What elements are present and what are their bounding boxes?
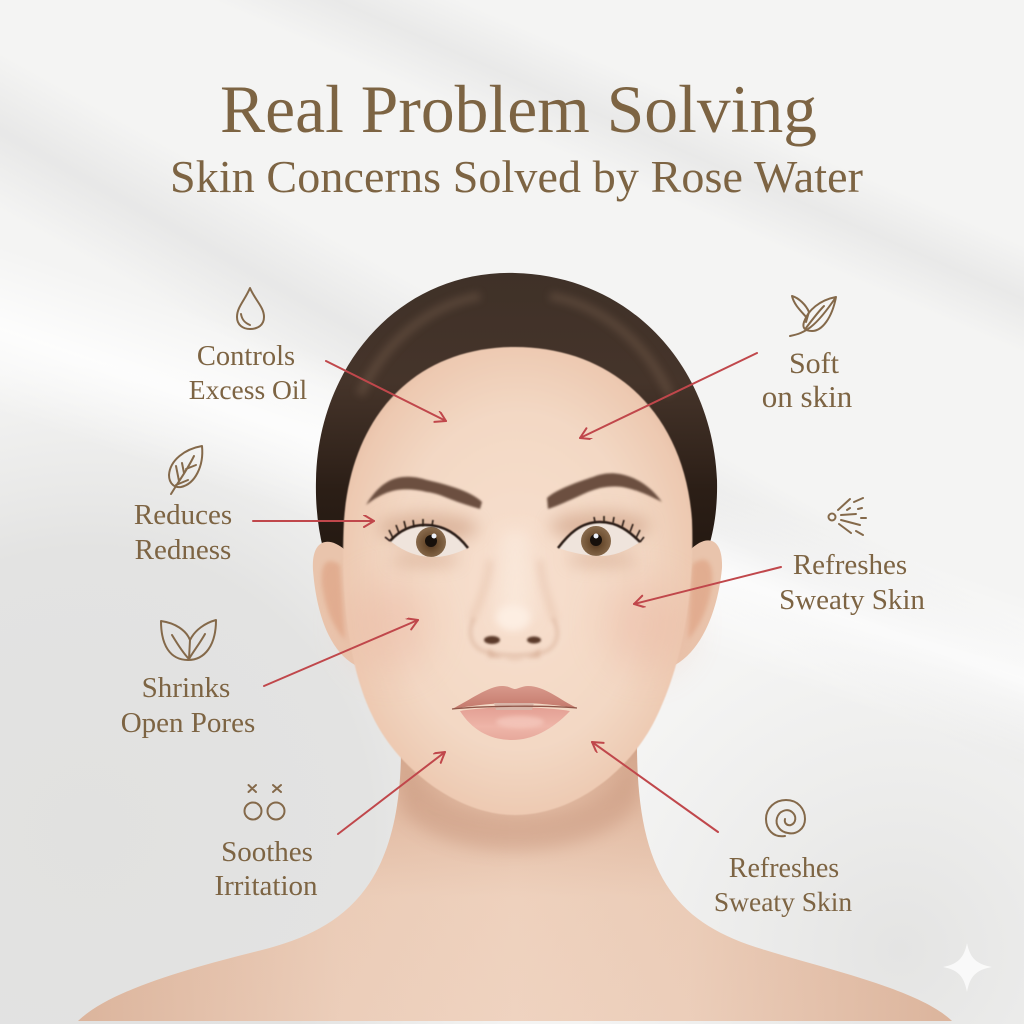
icon: spray mist: [828, 498, 866, 535]
callout: shrinks open pores: [121, 620, 255, 739]
left ear: [313, 542, 355, 665]
text: reduces redness: Redness: [135, 534, 231, 566]
nose highlight: [498, 530, 532, 620]
title: Real Problem Solving: [220, 72, 817, 147]
icon: crosses and circles: [244, 785, 284, 820]
text: refreshes sweaty skin: Refreshes: [729, 853, 839, 884]
icon: water drop: [237, 288, 264, 329]
text: controls excess oil: Controls: [197, 341, 295, 372]
arrow: redness: [253, 520, 374, 522]
arrow: refreshes upper: [634, 567, 781, 604]
icon: leaf: [169, 446, 202, 494]
right eye: [555, 516, 645, 560]
text: refreshes sweaty skin: Refreshes: [793, 549, 907, 581]
cheek blush: [350, 580, 685, 670]
arrow: irritation: [338, 752, 445, 834]
arrow: excess oil: [326, 361, 446, 421]
text: refreshes sweaty skin: Sweaty Skin: [714, 886, 852, 917]
hair: [316, 273, 717, 585]
right eyebrow: [547, 473, 662, 509]
callout: refreshes sweaty skin lower: [714, 800, 852, 917]
eye shadow: [378, 511, 650, 566]
arrow: pores: [264, 620, 418, 686]
subtitle: Skin Concerns Solved by Rose Water: [170, 151, 863, 202]
text: reduces redness: Reduces: [134, 499, 232, 531]
neck and shoulders: [78, 745, 952, 1021]
right ear: [675, 540, 722, 665]
face: [343, 347, 692, 815]
callout: soft on skin: [762, 296, 853, 414]
left eyebrow: [366, 477, 482, 509]
icon: spiral: [766, 800, 805, 836]
text: controls excess oil: Excess Oil: [189, 374, 308, 405]
arrow: soft on skin: [580, 353, 757, 438]
lips: [452, 686, 577, 740]
callout: reduces redness: [134, 446, 232, 566]
icon: feather and leaf: [790, 296, 836, 336]
text: shrinks open pores: Open Pores: [121, 707, 255, 739]
text: soft on skin: Soft: [789, 347, 840, 380]
text: refreshes sweaty skin: Sweaty Skin: [779, 584, 925, 616]
icon: two leaves: [161, 620, 216, 660]
callout: soothes irritation: [214, 785, 318, 902]
callout arrows: [253, 353, 781, 834]
text: soft on skin: on skin: [762, 379, 853, 414]
sparkle watermark: [943, 943, 992, 992]
text: shrinks open pores: Shrinks: [142, 672, 230, 704]
callout: controls excess oil: [189, 288, 308, 405]
callout: refreshes sweaty skin upper: [779, 498, 925, 616]
text: soothes irritation: Irritation: [214, 870, 318, 902]
hair part: [515, 298, 517, 348]
nose: [471, 560, 557, 660]
arrow: refreshes lower: [592, 742, 718, 832]
portrait: [78, 273, 952, 1021]
hair highlights: [360, 296, 670, 395]
text: soothes irritation: Soothes: [221, 836, 313, 868]
left eye: [384, 518, 470, 557]
